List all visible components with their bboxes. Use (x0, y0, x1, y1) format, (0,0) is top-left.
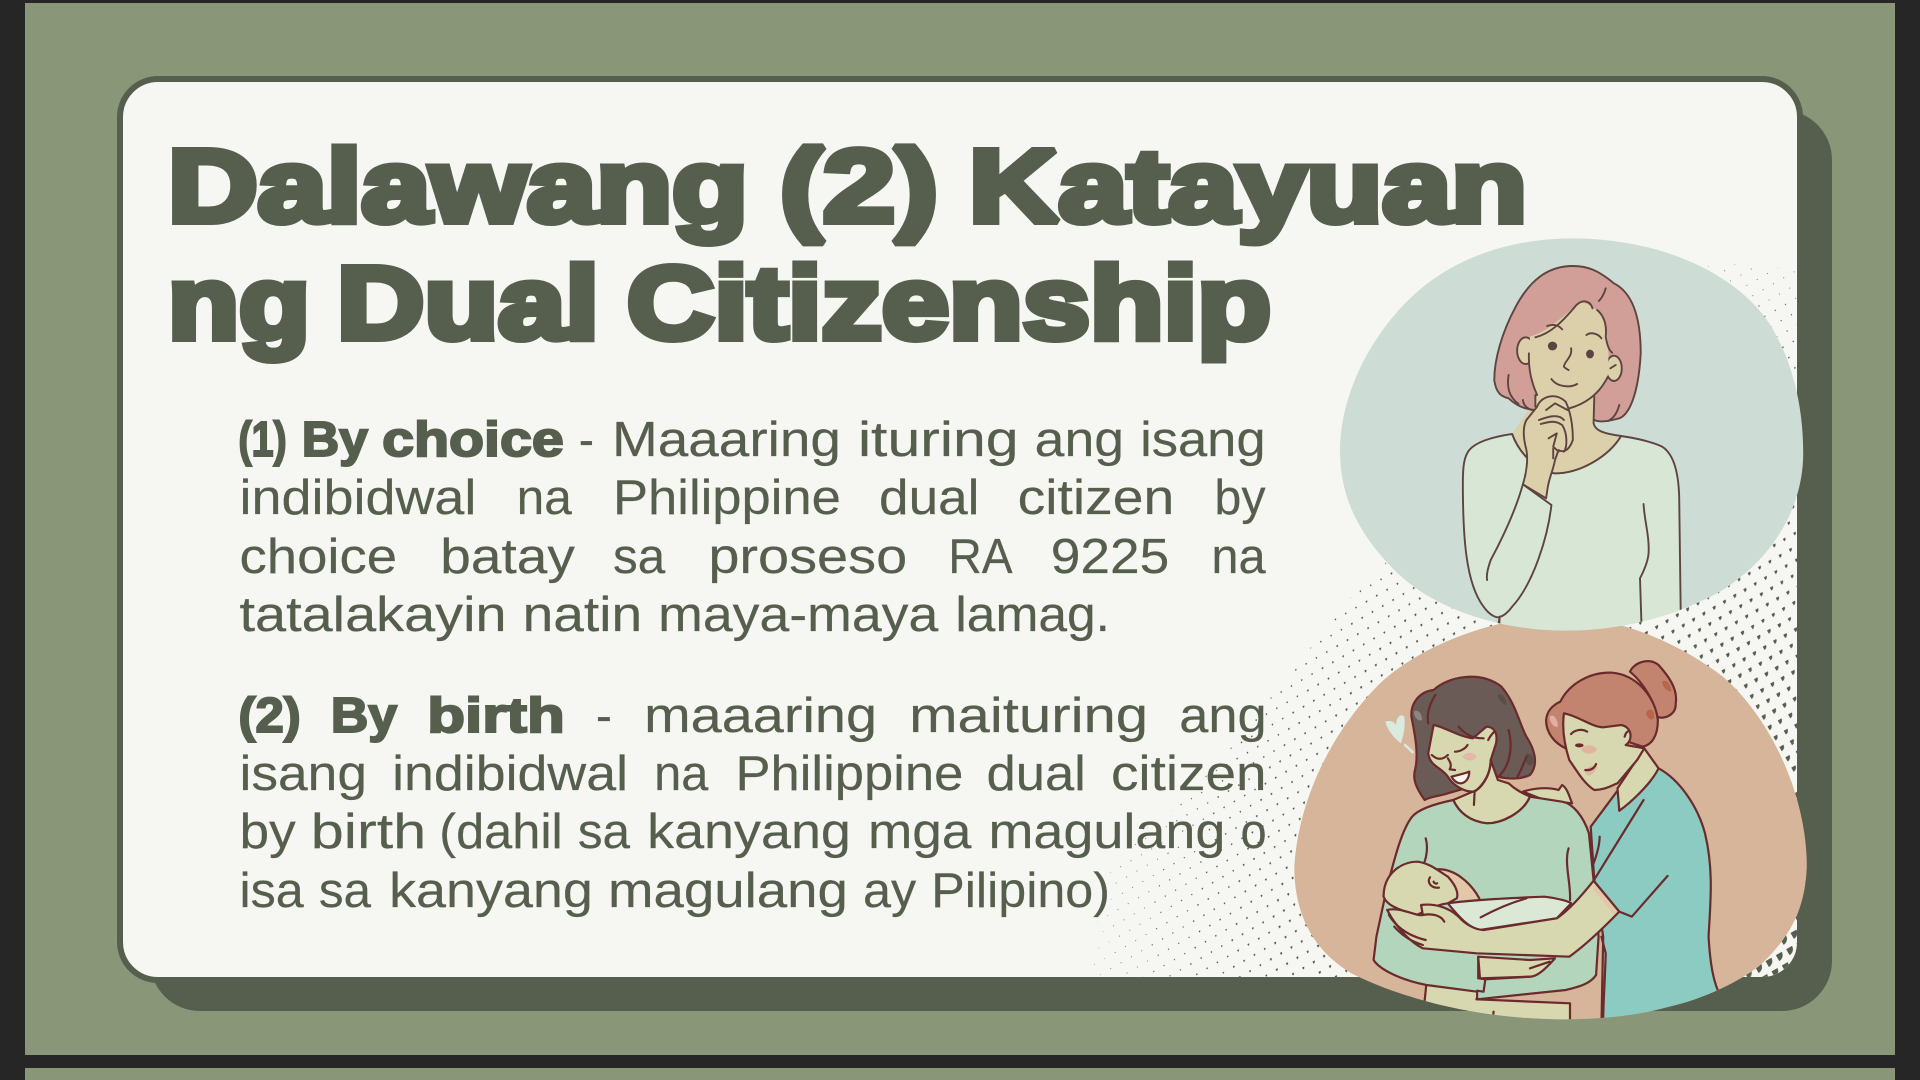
text block: by birth: (2) (238, 689, 301, 743)
sage blob (1340, 238, 1803, 631)
title: Katayuan (969, 128, 1527, 244)
text block: by birth: maaaring (644, 689, 877, 743)
mother mint sweater (1374, 797, 1599, 999)
text block: by choice: lamag. (955, 588, 1110, 642)
text block: by birth: By (331, 689, 398, 743)
text block: by choice: - (579, 413, 594, 467)
card drop shadow (150, 110, 1832, 1011)
mother hair (1411, 677, 1535, 800)
text block: by birth: kanyang (647, 805, 851, 859)
illustration: thinking woman on sage blob (1340, 238, 1803, 640)
text block: by birth: mga (868, 805, 972, 859)
title: Citizenship (627, 246, 1271, 360)
mother face (1428, 725, 1497, 792)
next slide edge (25, 1068, 1895, 1080)
text block: by birth: citizen (1111, 747, 1267, 801)
text block: by choice: choice (382, 413, 564, 467)
text block: by birth: birth (427, 689, 565, 743)
mother hair highlights (1414, 711, 1422, 720)
text block: by choice: ang (1035, 413, 1124, 467)
face (1530, 302, 1608, 394)
text block: by birth: - (596, 689, 612, 743)
nurse neck (1617, 748, 1659, 811)
hair (1494, 266, 1641, 421)
text block: by birth: ay (863, 864, 917, 918)
text block: by choice: 9225 (1051, 530, 1169, 584)
title: (2) (780, 128, 938, 244)
peach blob (1294, 617, 1807, 1019)
text block: by birth: magulang (988, 805, 1225, 859)
nurse arm and hand (1387, 881, 1619, 957)
text block: by choice: natin (523, 588, 642, 642)
text block: by choice: indibidwal (240, 471, 476, 525)
text block: by choice: batay (440, 530, 575, 584)
text block: by choice: dual (879, 471, 979, 525)
text block: by choice: RA (948, 530, 1013, 584)
ears (1516, 336, 1530, 365)
title: ng (168, 246, 310, 360)
text block: by birth: sa (319, 864, 372, 918)
text block: by choice (238, 413, 1266, 642)
text block: by choice: tatalakayin (240, 588, 507, 642)
nurse hair bun (1630, 661, 1676, 718)
title (168, 128, 1527, 360)
text block: by birth: magulang (608, 864, 848, 918)
baby head (1384, 862, 1457, 915)
neck cover (1534, 394, 1594, 428)
text block: by birth: birth (311, 805, 426, 859)
text block: by choice: choice (240, 530, 397, 584)
panel: main card (120, 79, 1800, 980)
sweater (1463, 434, 1681, 640)
nurse sleeve (1594, 800, 1667, 917)
text block: by birth: na (654, 747, 709, 801)
text block: by birth: (dahil (439, 805, 563, 859)
text block: by choice: ituring (858, 413, 1019, 467)
text block: by birth: by (240, 805, 296, 859)
text block: by birth: kanyang (389, 864, 593, 918)
text block: by birth: ang (1179, 689, 1267, 743)
pants (1424, 986, 1572, 1020)
arm lower (1478, 957, 1555, 978)
hand (1523, 396, 1573, 498)
text block: by birth: Philippine (735, 747, 963, 801)
sleeve (1487, 484, 1649, 623)
text block: by birth: indibidwal (392, 747, 628, 801)
nurse hand on shoulder (1523, 785, 1572, 803)
nurse face (1563, 713, 1644, 790)
text block: by birth: o (1240, 805, 1267, 859)
title: Dual (337, 246, 599, 360)
text block: by choice: na (1211, 530, 1266, 584)
baby blanket back (1440, 870, 1478, 900)
text block: by choice: citizen (1018, 471, 1174, 525)
text block: by choice: Maaaring (612, 413, 841, 467)
heart (1385, 715, 1405, 743)
text block: by choice: na (517, 471, 573, 525)
nurse hair (1546, 673, 1658, 748)
text block: by choice: By (302, 413, 369, 467)
figures (1374, 661, 1720, 1025)
chest and neck (1512, 410, 1620, 472)
baby swaddle (1448, 897, 1571, 930)
nurse teal top (1591, 768, 1720, 1025)
text block: by choice: proseso (708, 530, 907, 584)
mother chest (1453, 760, 1530, 823)
hair highlights (1550, 716, 1558, 727)
text block: by birth: Pilipino) (931, 864, 1110, 918)
figure (1463, 266, 1681, 640)
halftone dot pattern (1094, 264, 1797, 977)
text block: by birth: isang (240, 747, 367, 801)
text block: by choice: Philippine (613, 471, 841, 525)
text block: by birth: sa (578, 805, 631, 859)
text block: by choice: maya-maya (658, 588, 939, 642)
text block: by birth (238, 689, 1267, 918)
text block: by birth: dual (986, 747, 1086, 801)
text block: by birth: maituring (909, 689, 1148, 743)
title: Dalawang (168, 128, 748, 244)
text block: by choice: isang (1140, 413, 1266, 467)
illustration: mother, nurse and baby on peach blob (1294, 617, 1807, 1025)
text block: by birth: isa (240, 864, 304, 918)
text block: by choice: (1) (238, 413, 287, 467)
text block: by choice: sa (613, 530, 666, 584)
text block: by choice: by (1214, 471, 1266, 525)
